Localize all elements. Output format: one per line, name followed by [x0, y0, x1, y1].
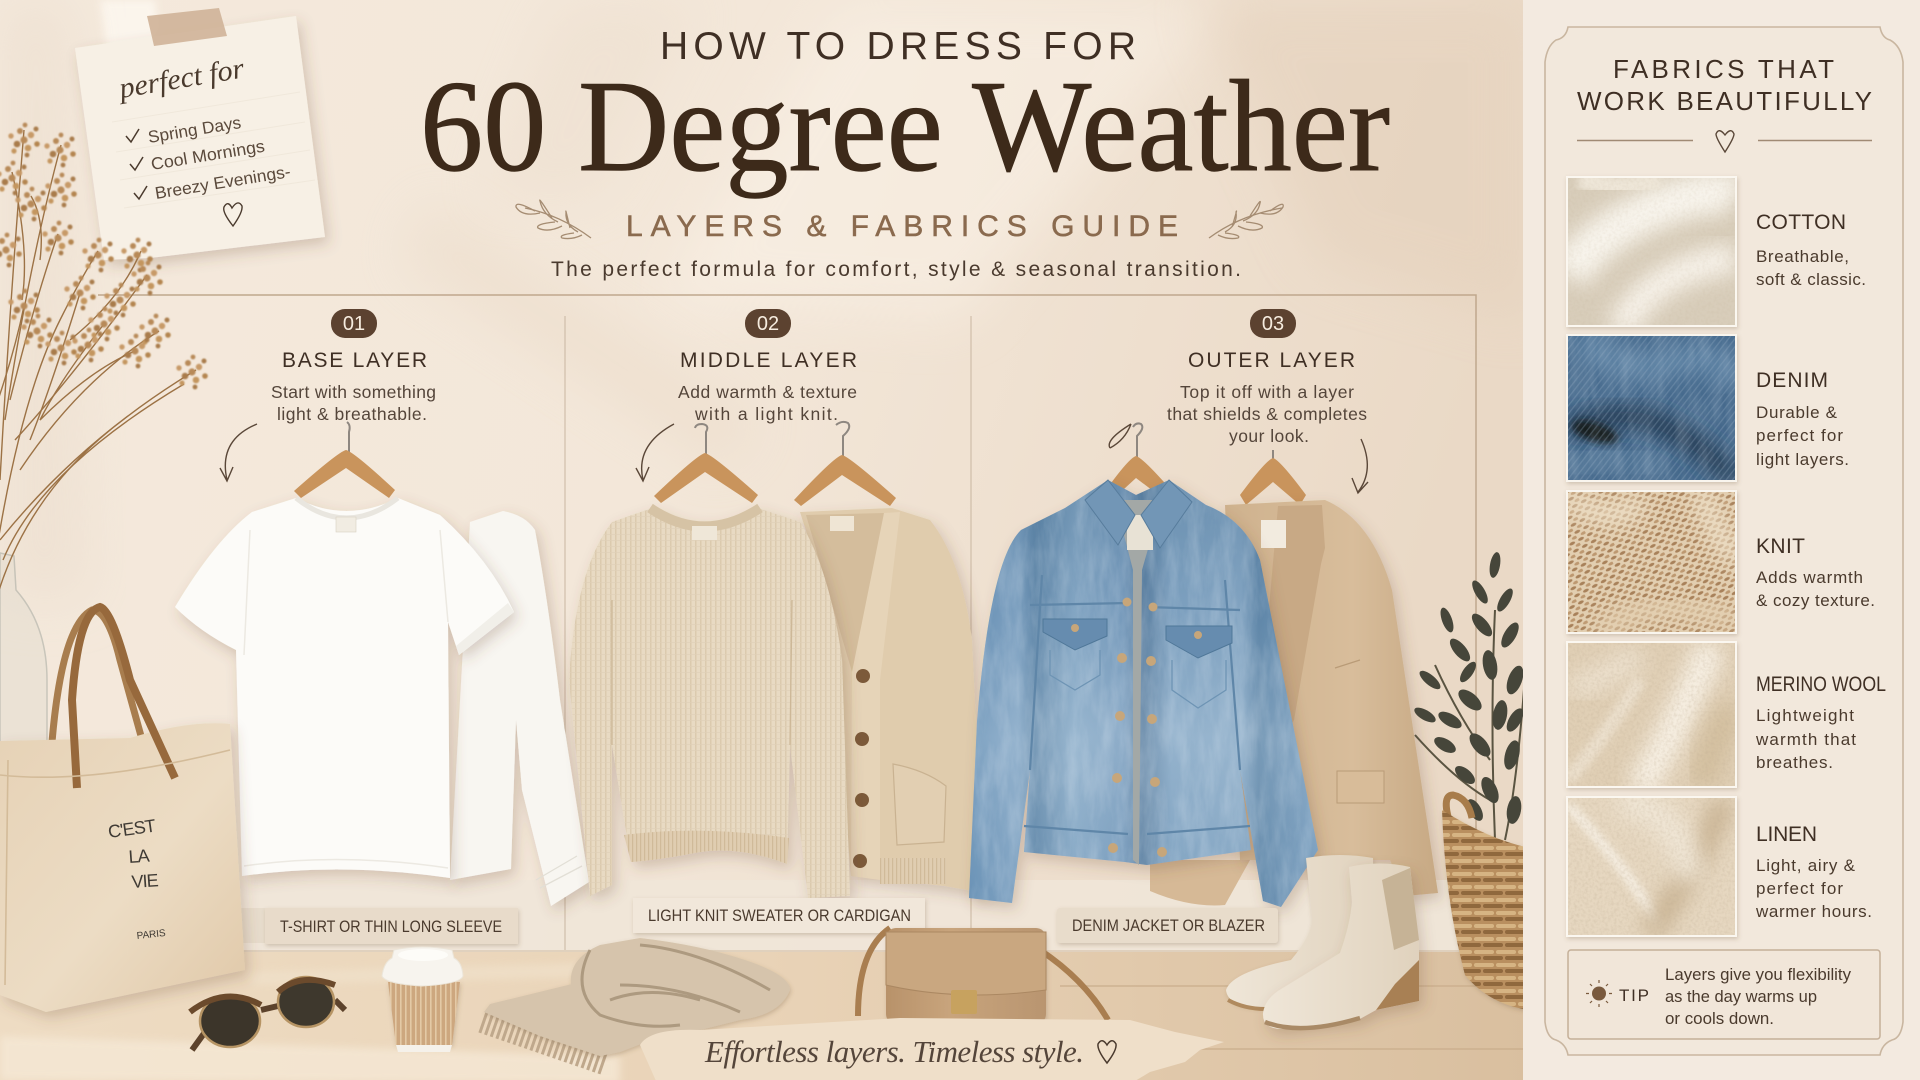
jacket buttons: [1071, 598, 1202, 857]
swatch: knit: [1566, 490, 1737, 634]
fabric text: denim: [1756, 403, 1849, 469]
fabric text: linen: perfect for: [1756, 879, 1843, 898]
fabric text: denim: light layers.: [1756, 450, 1849, 469]
jacket inner: [1115, 500, 1162, 865]
label: base: [233, 908, 518, 944]
panel frame: [1545, 27, 1903, 1055]
tip box: [1568, 950, 1880, 1039]
swatch: merino: [1566, 641, 1737, 790]
jacket yoke and hem: [1024, 575, 1250, 834]
coffee cup: [382, 947, 463, 1052]
hanger hooks: [347, 422, 1273, 460]
tote front handle: [72, 607, 175, 788]
scarf body: [484, 938, 790, 1056]
tote print: PARIS: [136, 928, 166, 942]
label: outer: [1057, 908, 1278, 943]
fabric name: cotton: COTTON: [1756, 211, 1846, 234]
fabric text: denim: perfect for: [1756, 426, 1843, 445]
description: middle layer: [678, 382, 857, 424]
fabric name: merino: MERINO WOOL: [1756, 673, 1886, 696]
sunglasses: [190, 977, 345, 1050]
tote print: VIE: [131, 870, 159, 892]
main title: 60 Degree Weather: [420, 54, 1390, 199]
tip label: TIP: [1619, 986, 1649, 1005]
icon: heart: [224, 203, 242, 226]
description: outer layer: Top it off with a layer: [1180, 382, 1354, 402]
note: perfect for: [75, 8, 325, 260]
jacket pockets: [1043, 619, 1232, 658]
fabric text: cotton: [1756, 247, 1866, 289]
label: base: T-SHIRT OR THIN LONG SLEEVE: [280, 917, 502, 936]
tip text: Layers give you flexibility: [1665, 966, 1852, 984]
cardigan pocket: [893, 764, 946, 845]
jacket collar: [1085, 480, 1192, 548]
kicker: HOW TO DRESS FOR: [660, 25, 1139, 68]
heading: outer layer: OUTER LAYER: [1188, 349, 1355, 372]
potted plant: [1412, 551, 1530, 1010]
description: middle layer: with a light knit.: [694, 404, 838, 424]
title block: [420, 25, 1390, 281]
boots: [1226, 855, 1419, 1029]
wall background: [0, 0, 1530, 1080]
badge 03: 03: [1262, 313, 1284, 335]
badge 03: [1250, 309, 1296, 338]
fabric text: cotton: soft & classic.: [1756, 270, 1866, 289]
vase: [0, 553, 47, 745]
tote print: LA: [128, 846, 150, 867]
fabric name: knit: KNIT: [1756, 535, 1805, 558]
tote body: [0, 723, 245, 1012]
arrow 3: [1109, 424, 1131, 448]
tote print: C'EST: [107, 815, 157, 842]
paper: [75, 16, 325, 260]
front boot: [1263, 864, 1419, 1029]
fabric: denim: [1566, 334, 1849, 482]
panel: fabrics: [1523, 0, 1920, 1080]
hangers: [294, 422, 1306, 506]
description: base layer: light & breathable.: [277, 404, 427, 424]
fabric text: knit: & cozy texture.: [1756, 591, 1875, 610]
panel heading: WORK BEAUTIFULLY: [1577, 86, 1872, 116]
fabric name: linen: LINEN: [1756, 823, 1817, 846]
panel heading: FABRICS THAT: [1613, 54, 1834, 84]
tagline: The perfect formula for comfort, style & seasonal transition.: [551, 258, 1241, 281]
outer layer garments: [960, 470, 1438, 915]
label: middle: [633, 898, 925, 933]
back boot: [1226, 855, 1375, 1007]
fabric text: linen: Light, airy &: [1756, 856, 1856, 875]
arrows: [220, 424, 1368, 493]
plant leaves: [1412, 551, 1527, 825]
blazer pocket: [1337, 771, 1384, 803]
label: middle: LIGHT KNIT SWEATER OR CARDIGAN: [648, 906, 911, 925]
floor: [0, 952, 1530, 1080]
fabric: cotton: [1566, 176, 1866, 330]
note list: [147, 113, 292, 203]
badge 02: [745, 309, 791, 338]
description: outer layer: your look.: [1229, 426, 1309, 446]
column headers: [271, 309, 1367, 446]
scarf fringe: [482, 1022, 604, 1064]
garment labels: [233, 898, 1278, 944]
panel heading: [1577, 54, 1872, 116]
fabric text: merino: Lightweight: [1756, 706, 1854, 725]
icon: left sprig: [516, 200, 591, 239]
tape: [147, 8, 227, 46]
stems: [0, 130, 196, 600]
dried flowers: [0, 123, 208, 600]
fabric text: linen: [1755, 856, 1872, 921]
fabric: linen: [1566, 796, 1872, 937]
cardigan: [800, 508, 984, 893]
fabric text: knit: Adds warmth: [1756, 568, 1863, 587]
heading: middle layer: MIDDLE LAYER: [680, 349, 857, 372]
fabric text: denim: Durable &: [1756, 403, 1838, 422]
description: base layer: [271, 382, 436, 424]
tote bag: [0, 607, 245, 1012]
fabric text: knit: [1756, 568, 1875, 610]
banner text: Effortless layers. Timeless style.: [704, 1034, 1084, 1069]
fabric name: denim: DENIM: [1756, 369, 1828, 392]
fabric: merino wool: [1566, 641, 1886, 790]
base layer garments: [175, 498, 589, 906]
blazer: [1150, 500, 1438, 905]
icon: right sprig: [1209, 202, 1283, 239]
fabric text: merino: warmth that: [1755, 730, 1856, 749]
description: base layer: Start with something: [271, 382, 436, 402]
tip text: as the day warms up: [1665, 988, 1817, 1006]
icon: check marks: [126, 129, 147, 199]
subtitle: LAYERS & FABRICS GUIDE: [626, 210, 1178, 243]
tote print: [107, 815, 166, 942]
tip text: or cools down.: [1665, 1010, 1774, 1028]
basket: [1446, 795, 1472, 830]
description: outer layer: [1167, 382, 1367, 446]
tip text: [1665, 966, 1852, 1028]
note heading: perfect for: [115, 52, 247, 105]
sweater: [569, 507, 850, 898]
label: outer: DENIM JACKET OR BLAZER: [1072, 916, 1265, 935]
fabric text: merino: breathes.: [1756, 753, 1833, 772]
blossoms: [0, 123, 208, 389]
scarf: [482, 938, 790, 1064]
swatch: linen: [1566, 796, 1737, 937]
fabric text: merino: [1755, 706, 1856, 772]
denim jacket: [960, 470, 1330, 915]
frame of layers: [98, 295, 1476, 950]
arrow 1: [220, 424, 257, 481]
crossbody bag: [858, 928, 1108, 1024]
heading: base layer: BASE LAYER: [282, 349, 427, 372]
badge 02: 02: [757, 313, 779, 335]
badge 01: [331, 309, 377, 338]
note list: Breezy Evenings-: [154, 162, 292, 203]
fabric text: cotton: Breathable,: [1756, 247, 1849, 266]
tote folds: [0, 750, 230, 985]
plant stems: [1415, 590, 1530, 840]
brush banner: [640, 1018, 1224, 1080]
note list: Spring Days: [147, 113, 242, 147]
cardigan buttons: [853, 669, 870, 868]
swatch: cotton: [1566, 176, 1737, 330]
description: outer layer: that shields & completes: [1167, 404, 1367, 424]
badge 01: 01: [343, 313, 365, 335]
fabric: knit: [1566, 490, 1875, 634]
t-shirt: [175, 498, 514, 878]
cardigan hem: [880, 858, 946, 884]
fabric text: linen: warmer hours.: [1755, 902, 1872, 921]
arrow 2: [636, 424, 674, 481]
description: middle layer: Add warmth & texture: [678, 382, 857, 402]
icon: banner heart: [1098, 1041, 1116, 1063]
t-shirt collar and tag: [244, 498, 582, 888]
panel divider: [1577, 131, 1872, 152]
swatch: denim: [1566, 334, 1737, 482]
long sleeve tee: [450, 511, 589, 906]
icon: sun: [1586, 980, 1612, 1007]
hanger woods: [294, 450, 1306, 506]
tote handles back: [52, 610, 141, 742]
arrow 4: [1352, 439, 1368, 493]
note list: Cool Mornings: [150, 137, 266, 174]
middle layer garments: [569, 507, 984, 898]
